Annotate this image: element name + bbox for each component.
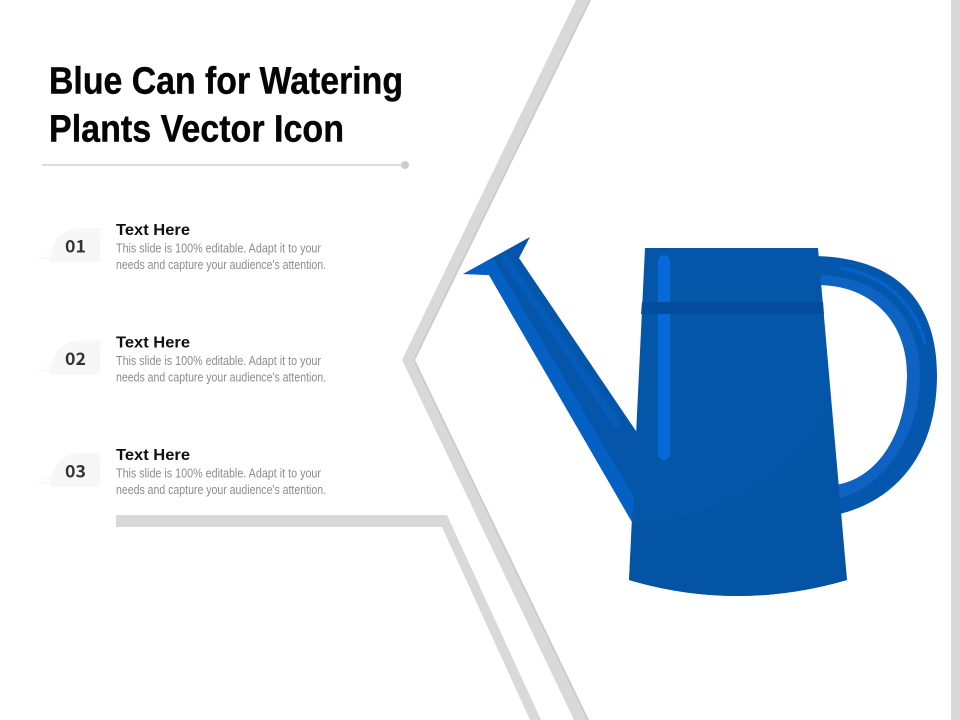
item heading 01: Text Here: [116, 222, 190, 239]
item heading 02: Text Here: [116, 334, 190, 352]
item description 03: needs and capture your audience's attention.: [116, 482, 326, 497]
can handle: [815, 256, 937, 515]
spout light strip: [463, 258, 634, 522]
item description 01: This slide is 100% editable. Adapt it to your: [116, 240, 322, 256]
list item 02: [38, 334, 326, 384]
item description 01: needs and capture your audience's attention.: [116, 257, 326, 272]
lower bracket line: [116, 515, 541, 720]
icon: watering can: [463, 237, 937, 596]
item description 02: needs and capture your audience's attention.: [116, 370, 326, 384]
item description 03: [116, 466, 326, 497]
number badge 02: [38, 340, 102, 374]
can spout: [463, 237, 650, 530]
item description 02: This slide is 100% editable. Adapt it to your: [116, 353, 322, 368]
item description 01: [116, 240, 326, 272]
number badge 01: 01: [65, 232, 86, 258]
title: Plants Vector Icon: [49, 108, 344, 150]
can band: [641, 302, 824, 314]
chevron frame: [402, 0, 591, 720]
item heading 03: Text Here: [116, 447, 190, 464]
number badge 03: [38, 453, 102, 487]
body highlight: [658, 255, 670, 460]
can body: [629, 248, 847, 596]
list item 03: [38, 447, 326, 497]
number badge 02: 02: [65, 345, 86, 370]
title: [49, 60, 403, 150]
band over highlight: [658, 302, 670, 314]
title: Blue Can for Watering: [49, 60, 403, 102]
number badge 01: [38, 228, 102, 262]
item description 03: This slide is 100% editable. Adapt it to your: [116, 466, 322, 480]
body lower shade: [629, 408, 847, 596]
right edge strip: [951, 0, 960, 720]
item description 02: [116, 353, 326, 384]
number badge 03: 03: [65, 458, 86, 482]
list item 01: [38, 222, 326, 272]
title rule: [42, 161, 409, 169]
